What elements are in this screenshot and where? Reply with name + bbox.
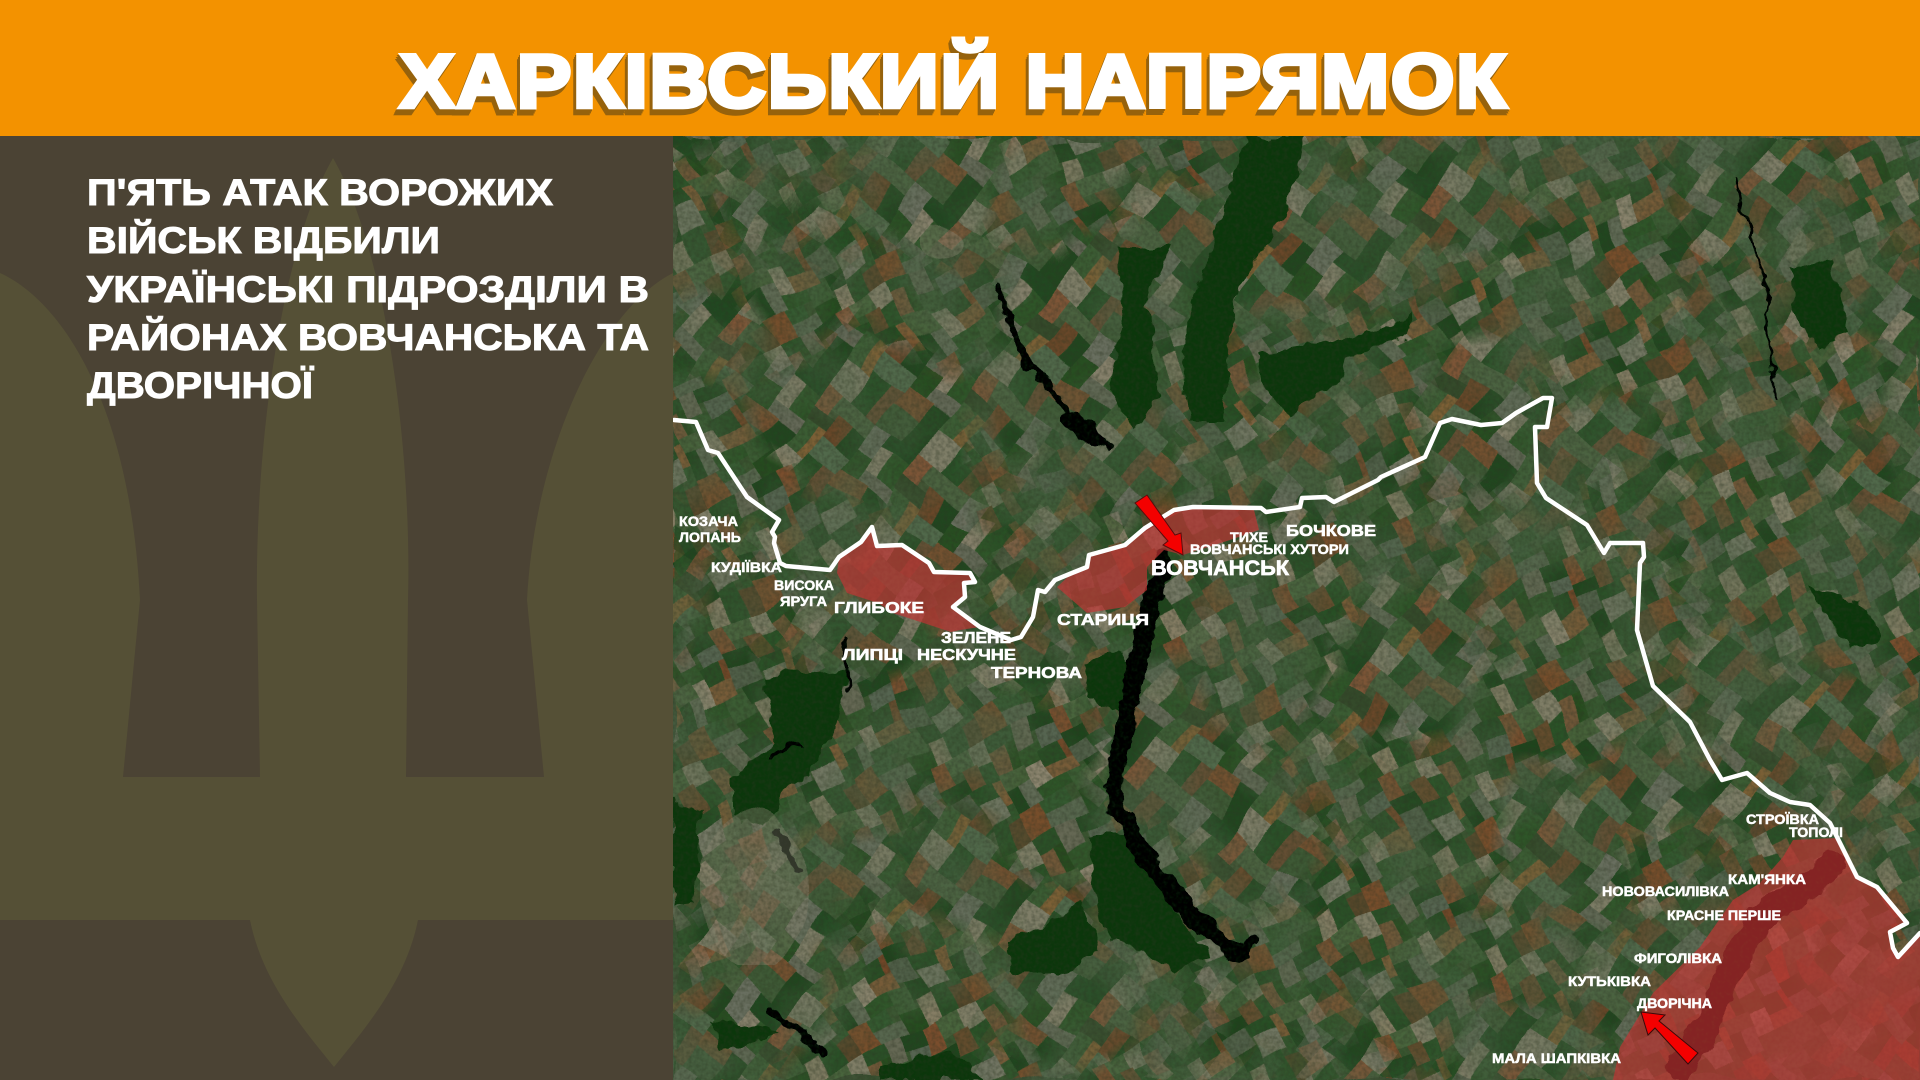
occupied zone: Starytsia and Vovchansk	[1057, 507, 1259, 613]
place labels: Dvorichna sector: НОВОВАСИЛІВКА	[1602, 883, 1729, 899]
place labels: Vovchansk sector: ЛОПАНЬ	[679, 529, 741, 545]
rivers and reservoirs	[770, 180, 1833, 1067]
place labels: Vovchansk sector	[679, 513, 1376, 682]
place labels: Dvorichna sector: ТОПОЛІ	[1789, 824, 1843, 840]
place labels: Vovchansk sector: ВОВЧАНСЬК	[1151, 557, 1289, 580]
urban areas	[700, 224, 1220, 965]
occupied zone: Hlyboke	[837, 527, 980, 632]
occupied zone: Dvorichna and Kupiansk direction	[1613, 838, 1920, 1080]
arrow: Dvorichna attack	[1641, 1012, 1698, 1064]
title: ХАРКІВСЬКИЙ НАПРЯМОК	[400, 39, 1508, 123]
place labels: Vovchansk sector: КУДІЇВКА	[711, 559, 782, 575]
header band	[0, 0, 1920, 136]
place labels: Vovchansk sector: СТАРИЦЯ	[1057, 612, 1149, 629]
panel: left text panel	[0, 136, 673, 1080]
summary text: УКРАЇНСЬКІ ПІДРОЗДІЛИ В	[87, 269, 649, 310]
place labels: Vovchansk sector: ЯРУГА	[780, 593, 827, 609]
place labels: Dvorichna sector: СТРОЇВКА	[1746, 811, 1819, 827]
place labels: Vovchansk sector: ВОВЧАНСЬКІ ХУТОРИ	[1190, 541, 1349, 557]
arrow: Vovchansk attack	[1135, 495, 1183, 555]
place labels: Dvorichna sector: КАМ'ЯНКА	[1728, 871, 1806, 887]
place labels: Vovchansk sector: БОЧКОВЕ	[1286, 523, 1376, 540]
place labels: Dvorichna sector: ДВОРІЧНА	[1637, 995, 1712, 1011]
summary text: РАЙОНАХ ВОВЧАНСЬКА ТА	[87, 316, 649, 358]
place labels: Dvorichna sector: КРАСНЕ ПЕРШЕ	[1667, 907, 1781, 923]
place labels: Dvorichna sector: ФИГОЛІВКА	[1634, 950, 1722, 966]
contact line	[674, 398, 1920, 957]
place labels: Dvorichna sector: КУТЬКІВКА	[1568, 973, 1651, 989]
icon: trident watermark	[0, 158, 673, 1067]
summary text	[87, 172, 649, 406]
place labels: Dvorichna sector: МАЛА ШАПКІВКА	[1492, 1050, 1621, 1066]
grain	[673, 136, 1920, 1080]
summary text: ДВОРІЧНОЇ	[87, 365, 314, 406]
place labels: Vovchansk sector: ЛИПЦІ	[842, 647, 903, 664]
place labels: Vovchansk sector: ЗЕЛЕНЕ	[941, 630, 1011, 647]
place labels: Vovchansk sector: НЕСКУЧНЕ	[917, 647, 1016, 664]
place labels: Vovchansk sector: ТИХЕ	[1230, 529, 1268, 545]
summary text: ВІЙСЬК ВІДБИЛИ	[87, 219, 440, 261]
forests	[673, 137, 1880, 1080]
place labels: Vovchansk sector: ВИСОКА	[774, 577, 834, 593]
place labels: Dvorichna sector	[1492, 811, 1843, 1066]
place labels: Vovchansk sector: КОЗАЧА	[679, 513, 738, 529]
summary text: П'ЯТЬ АТАК ВОРОЖИХ	[87, 172, 553, 213]
map: satellite background	[673, 136, 1920, 1080]
place labels: Vovchansk sector: ТЕРНОВА	[991, 665, 1083, 682]
place labels: Vovchansk sector: ГЛИБОКЕ	[834, 600, 924, 617]
